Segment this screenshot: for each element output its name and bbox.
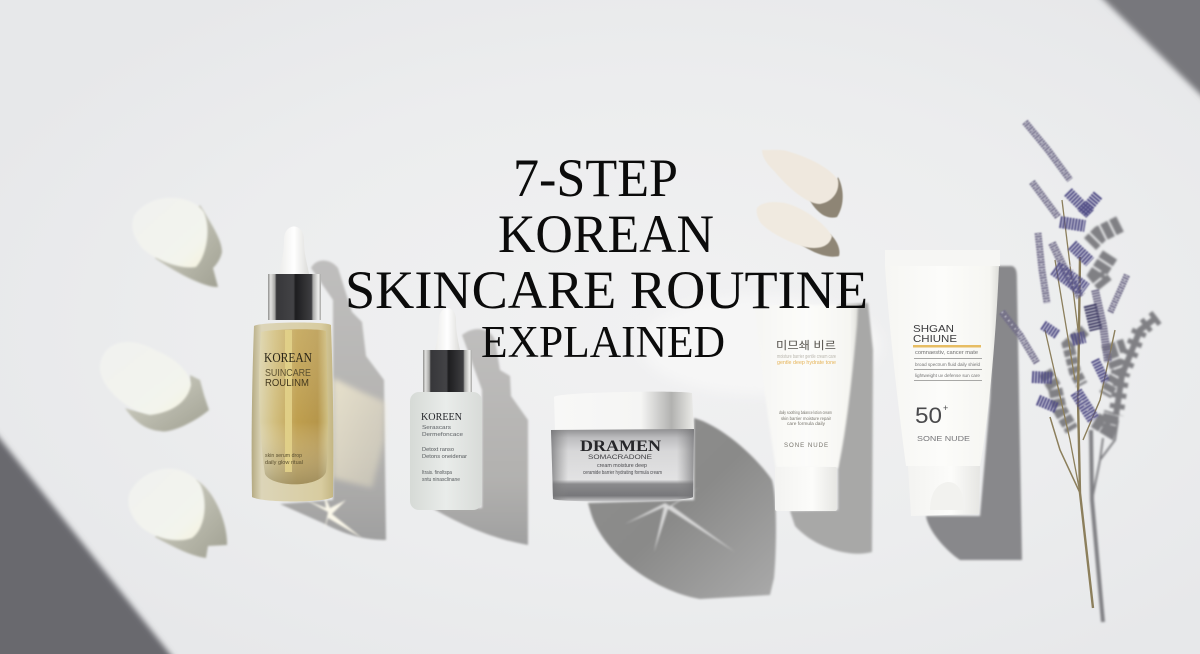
label: 미므쇄 비르 xyxy=(776,339,836,352)
product shadows xyxy=(280,260,1022,599)
shadow: white tube xyxy=(926,266,1022,560)
label: ceramide barrier hydrating formula cream xyxy=(583,470,662,476)
shadow: yellow tube xyxy=(790,303,873,554)
label xyxy=(421,412,467,483)
petal: bottom xyxy=(128,469,227,558)
label: SONE NUDE xyxy=(917,434,970,443)
label: 50 xyxy=(915,403,942,428)
shadow wedge: top right xyxy=(1094,0,1200,104)
label: skin barrier moisture repair xyxy=(781,416,831,421)
label: SHGAN xyxy=(913,323,954,335)
stems xyxy=(1045,200,1115,608)
label: care formula daily xyxy=(787,421,826,426)
label: KOREEN xyxy=(421,412,462,423)
label xyxy=(776,339,836,449)
label xyxy=(913,323,982,443)
collar xyxy=(268,274,321,320)
title xyxy=(345,148,868,367)
label: SONE NUDE xyxy=(784,442,829,449)
label: broad spectrum fluid daily shield xyxy=(915,362,980,367)
light star: jar xyxy=(625,487,735,552)
dropper bulb xyxy=(435,308,460,350)
label: cream moisture deep xyxy=(597,463,647,469)
caustic light: amber serum xyxy=(333,378,385,488)
tube seal xyxy=(885,250,1000,266)
label: KOREAN xyxy=(264,351,312,366)
label: comnaestiv, cancer mate xyxy=(915,350,978,356)
light star: amber serum xyxy=(306,494,362,538)
label: SUINCARE xyxy=(265,368,311,379)
title: SKINCARE ROUTINE xyxy=(345,260,868,320)
label: sntu ninasclinane xyxy=(422,477,460,483)
label: daily glow ritual xyxy=(265,460,303,466)
petal: top xyxy=(132,198,222,287)
label: DRAMEN xyxy=(580,438,661,455)
label: Dermefoncace xyxy=(422,432,463,438)
oil fade xyxy=(259,329,328,484)
lavender shadow xyxy=(1045,224,1157,622)
shadow: cream jar xyxy=(588,418,776,599)
product: yellow label tube xyxy=(755,305,858,511)
flower clusters xyxy=(1032,192,1106,420)
title: KOREAN xyxy=(498,204,714,264)
label: Detons oneidenar xyxy=(422,454,467,460)
oil fill xyxy=(259,329,328,484)
label: SOMACRADONE xyxy=(588,454,653,461)
label xyxy=(264,351,312,466)
dropper bulb xyxy=(279,226,309,274)
glass body xyxy=(252,322,333,502)
petal: middle xyxy=(100,342,209,431)
frosted body xyxy=(410,392,482,510)
shadow wedge: bottom left xyxy=(0,426,178,654)
floret highlights xyxy=(1002,122,1127,420)
label xyxy=(580,438,662,476)
tube cap xyxy=(775,467,837,511)
label: daily soothing balance lotion cream xyxy=(779,410,832,415)
label: gentle deep hydrate tone xyxy=(777,360,836,366)
cap notch xyxy=(930,482,964,510)
glass base xyxy=(551,429,694,501)
product: sunscreen tube xyxy=(885,250,1000,516)
swatch: lower xyxy=(757,202,840,257)
tube cap xyxy=(908,466,980,516)
label: moisture barrier gentle cream care xyxy=(777,354,836,360)
cream swatches xyxy=(757,150,843,257)
shadow: frosted serum xyxy=(432,329,528,545)
label: CHIUNE xyxy=(913,333,957,345)
tube body xyxy=(755,305,858,468)
lavender sprig xyxy=(1002,122,1157,622)
soft glow beside the tube xyxy=(640,295,880,395)
product: frosted serum bottle xyxy=(410,308,482,510)
collar xyxy=(423,350,472,393)
label: lightweight uv defense sun care xyxy=(915,373,981,378)
label: Detoxt ranso xyxy=(422,447,454,453)
label: Serascars xyxy=(422,425,451,431)
glass side shading xyxy=(551,429,694,501)
label: skin serum drop xyxy=(265,453,302,459)
label: ROULINM xyxy=(265,378,309,389)
jar lid xyxy=(554,392,694,430)
title: 7-STEP xyxy=(513,148,678,208)
label: + xyxy=(943,403,948,413)
tube body xyxy=(885,266,999,466)
dropper tube xyxy=(285,330,292,472)
rose petals xyxy=(100,198,227,558)
swatch: upper xyxy=(762,150,843,218)
flower spikes xyxy=(1002,122,1127,363)
title: EXPLAINED xyxy=(481,317,725,367)
product: amber serum bottle xyxy=(252,226,333,502)
product: cream jar xyxy=(551,392,694,501)
shadow: amber serum xyxy=(280,260,386,540)
label: Itrais. finoltspa xyxy=(422,470,452,476)
